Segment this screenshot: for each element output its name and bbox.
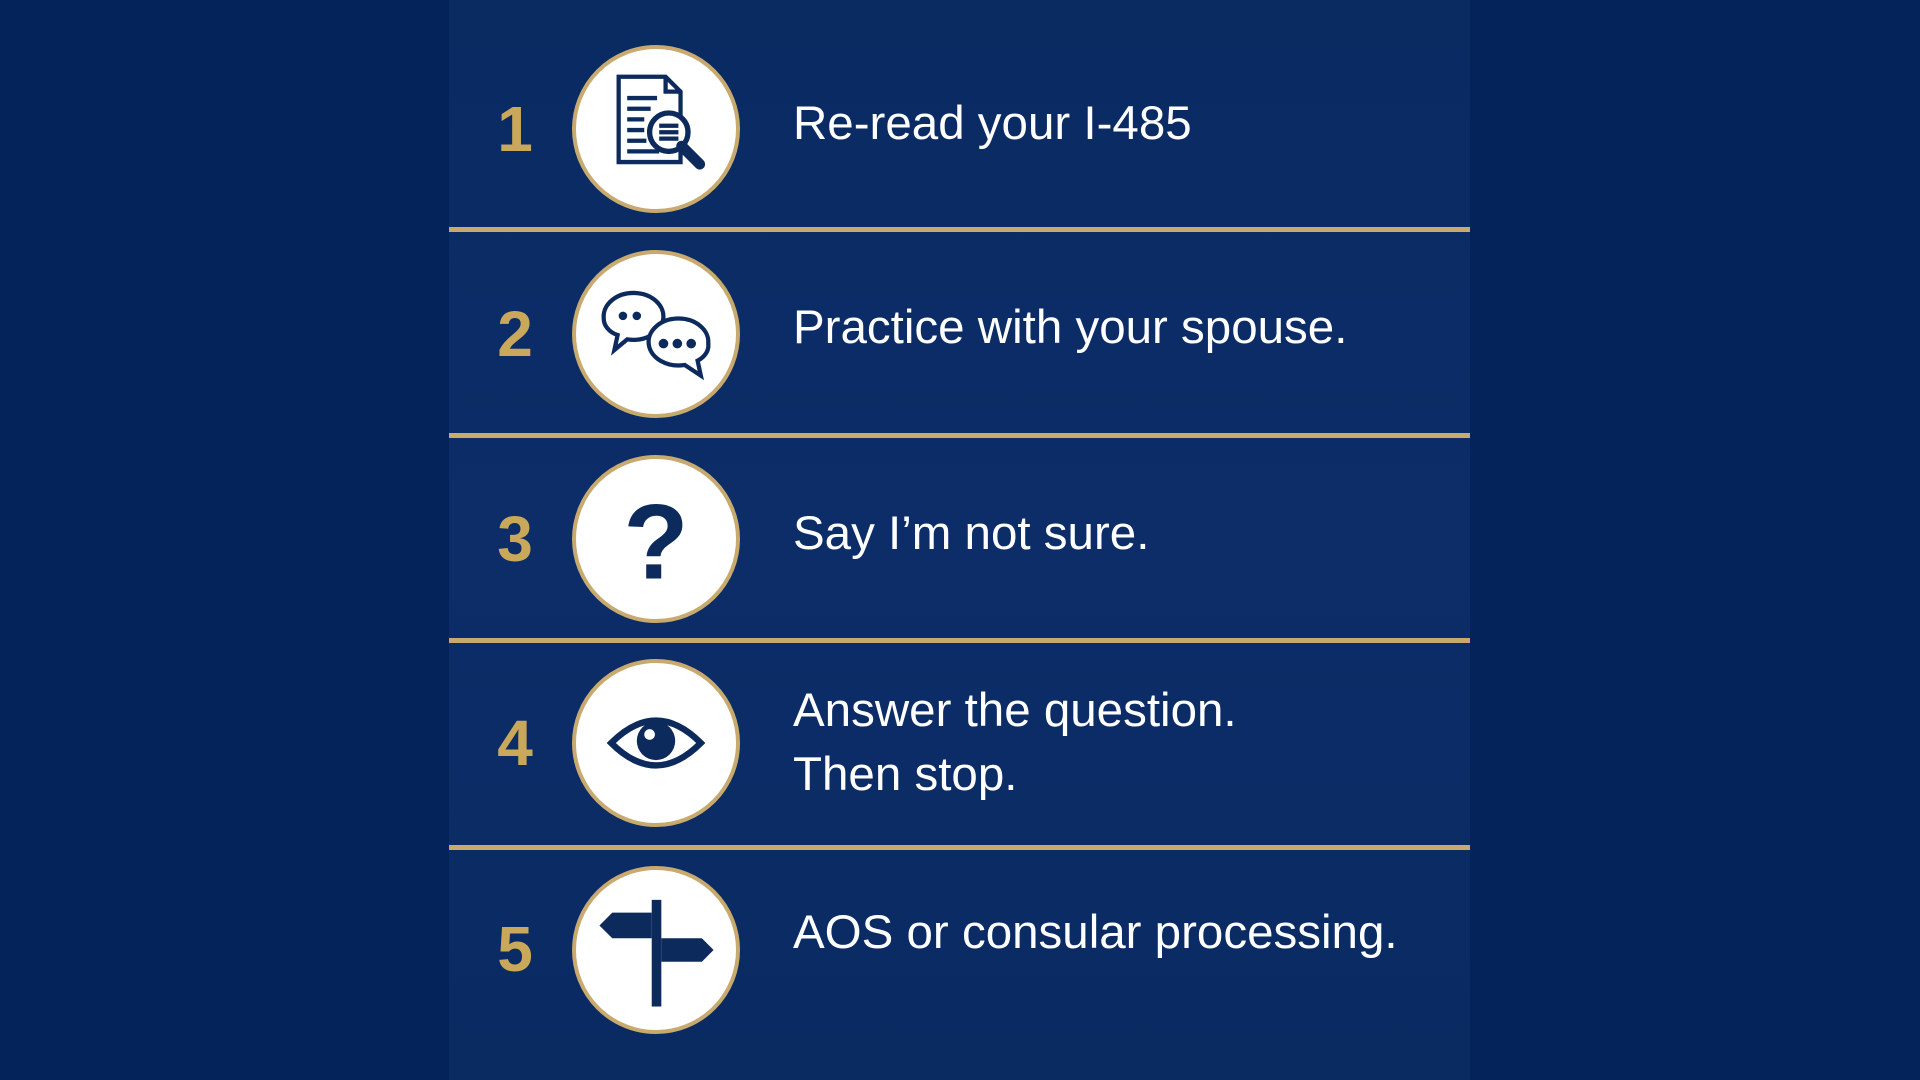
step 3 number: 3 xyxy=(497,503,533,575)
step 5 number: 5 xyxy=(497,913,533,985)
step 3 text: Say I’m not sure. xyxy=(793,507,1149,560)
step 2 number: 2 xyxy=(497,298,533,370)
panel: steps xyxy=(449,0,1470,1080)
icon: document magnifier xyxy=(572,45,740,213)
step 1 text: Re-read your I-485 xyxy=(793,97,1192,150)
step 4 text: Then stop. xyxy=(793,748,1017,801)
icon: question mark xyxy=(572,455,740,623)
icon: question mark: ? xyxy=(623,481,689,601)
icon: speech bubbles xyxy=(572,250,740,418)
step 2 text: Practice with your spouse. xyxy=(793,301,1347,354)
step 5 text: AOS or consular processing. xyxy=(793,906,1398,959)
step 4 text: Answer the question. xyxy=(793,684,1237,737)
icon: signpost xyxy=(572,866,740,1034)
icon: eye xyxy=(572,659,740,827)
step 4 number: 4 xyxy=(497,707,533,779)
step 4 text xyxy=(793,684,1237,801)
step 1 number: 1 xyxy=(497,93,533,165)
